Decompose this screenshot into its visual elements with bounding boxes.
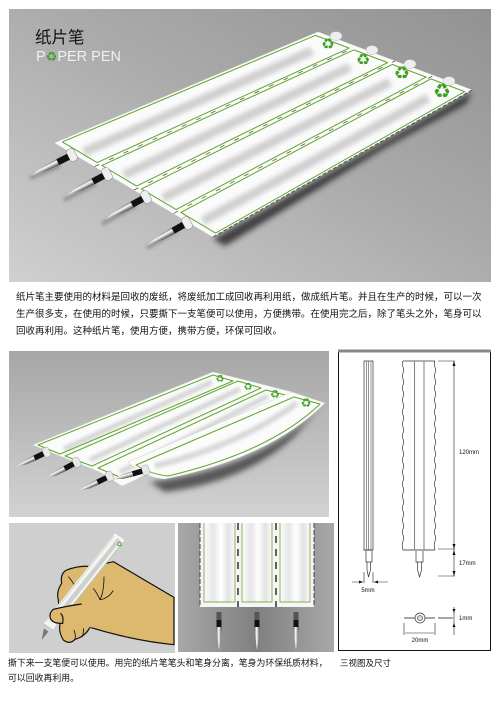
pen caps and recycle marks <box>321 32 455 103</box>
caption: usage: 撕下来一支笔便可以使用。用完的纸片笔笔头和笔身分离，笔身为环保纸质材料， <box>8 657 328 668</box>
title: P♻PER PEN <box>36 49 121 65</box>
panel: torn strip render <box>9 351 329 517</box>
pen caps and recycle marks: ♻ <box>433 79 451 103</box>
panel: front view with pen tips <box>178 523 334 652</box>
recycle marks: ♻ <box>270 388 280 401</box>
product sheet <box>55 32 472 237</box>
pen tips <box>14 446 150 495</box>
length dimensions: 120mm <box>459 450 479 456</box>
panel: hand holding pen <box>9 523 175 653</box>
recycle marks <box>216 374 311 410</box>
finger creases <box>68 577 113 639</box>
length dimensions: 17mm <box>459 561 476 567</box>
length dimensions <box>438 361 479 576</box>
panel: technical drawing <box>338 350 491 650</box>
side view pen <box>364 361 373 577</box>
5mm dimension: 5mm <box>361 588 375 594</box>
recycle marks: ♻ <box>301 396 311 410</box>
description paragraph <box>16 291 482 337</box>
pen caps and recycle marks: ♻ <box>394 63 410 84</box>
title <box>35 28 121 65</box>
recycle marks: ♻ <box>216 374 225 385</box>
section view <box>404 607 472 644</box>
paper strips <box>200 523 314 607</box>
caption: usage: 可以回收再利用。 <box>8 672 79 683</box>
pen caps and recycle marks: ♻ <box>321 35 335 53</box>
caption: usage <box>8 657 328 683</box>
thumb <box>50 600 113 627</box>
recycle marks: ♻ <box>244 382 253 393</box>
description paragraph: 生产很多支，在使用的时候，只要撕下一支笔便可以使用，方便携带。在使用完之后，除了笔头之外，笔身可以 <box>16 308 482 320</box>
pen tips <box>28 147 194 251</box>
pen caps and recycle marks: ♻ <box>356 50 370 69</box>
description paragraph: 回收再利用。这种纸片笔，使用方便，携带方便，环保可回收。 <box>16 325 282 337</box>
section view: 20mm <box>412 638 428 644</box>
front view pen <box>402 361 436 577</box>
title: 纸片笔 <box>35 28 84 47</box>
pen: ♻ <box>116 541 122 549</box>
5mm dimension <box>352 572 388 594</box>
caption: drawing: 三视图及尺寸 <box>340 658 392 668</box>
hand <box>58 562 174 645</box>
section view: 1mm <box>459 616 472 622</box>
curled strip <box>128 392 325 479</box>
description paragraph: 纸片笔主要使用的材料是回收的废纸，将废纸加工成回收再利用纸，做成纸片笔。并且在生产的时候，可以一次 <box>16 291 482 303</box>
panel: hero render <box>9 9 491 282</box>
separated pen tips <box>216 612 299 650</box>
